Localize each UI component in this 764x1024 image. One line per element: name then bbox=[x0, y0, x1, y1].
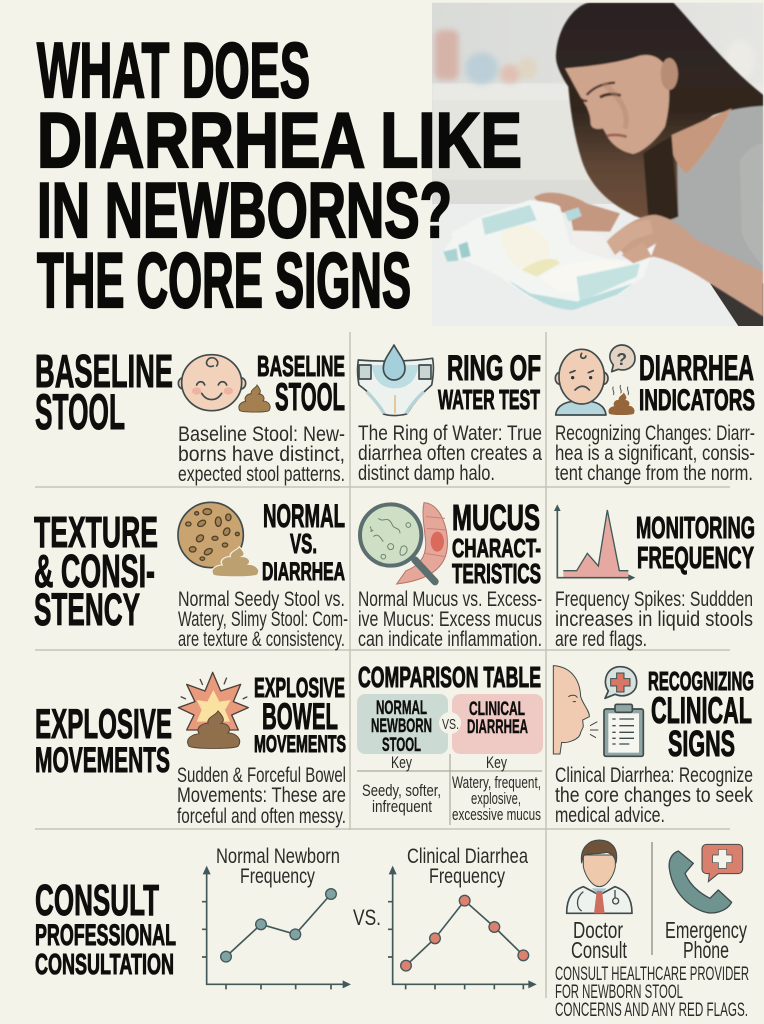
panel heading bbox=[262, 498, 345, 586]
row heading: explosive movements: MOVEMENTS bbox=[35, 741, 170, 780]
clinical diarrhea description: Watery, frequent, bbox=[452, 773, 541, 792]
body text: medical advice. bbox=[555, 803, 665, 827]
normal stool column header: NORMAL bbox=[376, 698, 427, 719]
body text bbox=[358, 421, 542, 485]
chart title: Normal Newborn bbox=[216, 844, 340, 868]
panel: ring of water test bbox=[358, 345, 542, 485]
body text: forceful and often messy. bbox=[177, 804, 346, 828]
body text: are texture & consistency. bbox=[178, 627, 345, 651]
panel heading: NORMAL bbox=[263, 498, 345, 534]
body text: diarrhea often creates a bbox=[358, 441, 542, 465]
title: DIARRHEA LIKE bbox=[37, 96, 522, 184]
clinical diarrhea column header: CLINICAL bbox=[469, 699, 525, 720]
panel: doctor consult bbox=[567, 840, 632, 963]
body text: The Ring of Water: True bbox=[358, 421, 542, 445]
chart title: Clinical Diarrhea bbox=[407, 844, 528, 868]
body text bbox=[358, 587, 542, 651]
panel heading: CHARACT- bbox=[452, 533, 541, 563]
title: IN NEWBORNS? bbox=[37, 166, 452, 254]
body text: can indicate inflammation. bbox=[358, 627, 542, 651]
chart title: Frequency bbox=[240, 864, 315, 888]
face bbox=[565, 55, 669, 154]
panel: diarrhea indicators bbox=[555, 345, 755, 485]
clinical diarrhea column header bbox=[452, 694, 543, 754]
panel heading bbox=[648, 666, 754, 764]
label bbox=[571, 917, 627, 963]
icon: magnifying glass over intestine bbox=[360, 503, 447, 584]
panel heading: WATER TEST bbox=[438, 384, 540, 415]
vs badge: VS. bbox=[442, 716, 459, 733]
panel heading: COMPARISON TABLE bbox=[358, 662, 541, 694]
row heading: explosive movements bbox=[35, 700, 172, 780]
body text: Normal Seedy Stool vs. bbox=[178, 587, 345, 611]
panel heading: BASELINE bbox=[257, 351, 345, 383]
row heading: texture and consistency bbox=[34, 508, 158, 635]
body text bbox=[555, 587, 753, 651]
panel heading: STOOL bbox=[275, 376, 345, 419]
label: Doctor bbox=[573, 917, 623, 943]
panel heading: RING OF bbox=[447, 349, 541, 388]
panel heading bbox=[636, 510, 755, 575]
normal stool description: Seedy, softer, bbox=[362, 781, 441, 800]
ear bbox=[661, 58, 678, 90]
grid lines bbox=[35, 332, 730, 998]
vs badge bbox=[439, 712, 461, 734]
key labels bbox=[391, 753, 507, 772]
normal stool description: infrequent bbox=[372, 797, 432, 816]
left hand bbox=[534, 193, 620, 232]
row heading: consult: CONSULTATION bbox=[35, 949, 174, 981]
chart title: Frequency bbox=[429, 864, 505, 888]
body text: borns have distinct, bbox=[178, 442, 345, 466]
body text: Normal Mucus vs. Excess- bbox=[358, 587, 542, 611]
line plot bbox=[388, 866, 537, 989]
body text: Watery, Slimy Stool: Com- bbox=[178, 607, 348, 631]
icon: phone with medical bubble bbox=[669, 844, 743, 913]
arm bbox=[610, 215, 763, 317]
normal stool column header: STOOL bbox=[382, 735, 421, 756]
label: Phone bbox=[683, 937, 729, 963]
fingers bbox=[607, 220, 653, 255]
body text bbox=[178, 422, 345, 486]
icon: exploding stool bbox=[178, 672, 248, 748]
photo: mother inspecting a diaper bbox=[432, 3, 763, 326]
table rules bbox=[357, 754, 542, 825]
body text: Sudden & Forceful Bowel bbox=[177, 763, 346, 787]
body text: expected stool patterns. bbox=[178, 462, 345, 486]
body text: Baseline Stool: New- bbox=[178, 422, 345, 446]
panel heading: BOWEL bbox=[262, 696, 338, 737]
body text: ive Mucus: Excess mucus bbox=[358, 607, 542, 631]
dark hair behind neck bbox=[643, 137, 678, 221]
chart title bbox=[407, 844, 528, 888]
panel heading: VS. bbox=[290, 528, 317, 559]
key labels: Key bbox=[486, 753, 507, 772]
chart: clinical diarrhea frequency bbox=[388, 844, 537, 989]
panel: recognizing clinical signs bbox=[553, 666, 754, 827]
shirt bbox=[663, 105, 763, 277]
panel: mucus characteristics bbox=[358, 497, 542, 651]
clinical diarrhea description: excessive mucus bbox=[452, 805, 541, 824]
panel heading: TERISTICS bbox=[452, 558, 541, 589]
row heading: texture and consistency: & CONSI- bbox=[34, 545, 155, 597]
row heading: baseline stool: STOOL bbox=[35, 384, 125, 440]
panel heading bbox=[257, 351, 345, 419]
panel: explosive bowel movements bbox=[177, 672, 346, 828]
normal stool column header bbox=[357, 694, 448, 756]
row heading: consult: CONSULT bbox=[35, 876, 159, 925]
body text: distinct damp halo. bbox=[358, 461, 495, 485]
panel heading bbox=[639, 349, 755, 417]
body text: Movements: These are bbox=[177, 783, 346, 807]
panel: comparison table bbox=[357, 662, 543, 825]
body text bbox=[177, 763, 346, 828]
chart title bbox=[216, 844, 340, 888]
clinical diarrhea description bbox=[452, 773, 541, 824]
panel heading: MOVEMENTS bbox=[254, 731, 346, 758]
panel heading: EXPLOSIVE bbox=[254, 672, 345, 703]
title bbox=[37, 26, 522, 324]
normal stool description bbox=[362, 781, 441, 816]
brow and eye bbox=[587, 83, 615, 95]
panel heading bbox=[438, 349, 541, 415]
icon: face, medical bubble and clipboard bbox=[553, 666, 643, 756]
neck bbox=[672, 108, 732, 174]
panel heading bbox=[254, 672, 346, 758]
body text bbox=[178, 587, 348, 651]
back hair bbox=[556, 3, 763, 220]
row heading: consult bbox=[35, 876, 176, 981]
body text bbox=[555, 421, 755, 485]
body text bbox=[555, 763, 753, 827]
icon: worried baby with question bubble bbox=[555, 345, 635, 415]
icon: worried baby with question bubble: ? bbox=[616, 349, 627, 369]
normal stool column header: NEWBORN bbox=[371, 716, 432, 737]
panel: monitoring frequency bbox=[554, 504, 755, 651]
line plot bbox=[202, 866, 351, 989]
icon: diaper with water drop bbox=[358, 345, 433, 415]
title: THE CORE SIGNS bbox=[37, 236, 411, 324]
vs label: VS. bbox=[353, 905, 381, 930]
clinical diarrhea description: explosive, bbox=[471, 789, 521, 808]
row heading: texture and consistency: TEXTURE bbox=[34, 508, 158, 557]
panel: emergency phone bbox=[665, 844, 747, 963]
label: Consult bbox=[571, 937, 627, 963]
row heading: consult: PROFESSIONAL bbox=[35, 919, 176, 952]
label bbox=[665, 917, 747, 963]
diaper bbox=[443, 200, 656, 310]
chart: normal newborn frequency bbox=[202, 844, 351, 989]
row heading: baseline stool bbox=[35, 345, 173, 440]
callout: consult healthcare provider: FOR NEWBORN STOOL bbox=[555, 982, 683, 1003]
row heading: baseline stool: BASELINE bbox=[35, 345, 173, 397]
callout: consult healthcare provider bbox=[555, 964, 749, 1021]
key labels: Key bbox=[391, 753, 412, 772]
row heading: explosive movements: EXPLOSIVE bbox=[35, 700, 172, 747]
icon: doctor bbox=[567, 840, 632, 913]
icon: seedy stool texture bbox=[178, 502, 259, 577]
row heading: texture and consistency: STENCY bbox=[34, 584, 140, 635]
panel heading: MUCUS bbox=[452, 497, 540, 538]
panel: baseline stool bbox=[178, 351, 345, 486]
icon: smiling baby and stool bbox=[178, 355, 270, 412]
divider bbox=[651, 842, 653, 955]
panel: normal vs diarrhea bbox=[178, 498, 348, 651]
chart: frequency spike bbox=[554, 504, 635, 581]
body text: are red flags. bbox=[555, 627, 647, 651]
panel heading: DIARRHEA bbox=[262, 558, 345, 586]
clinical diarrhea column header: DIARRHEA bbox=[467, 717, 528, 738]
title: WHAT DOES bbox=[37, 26, 310, 114]
panel heading bbox=[452, 497, 541, 589]
